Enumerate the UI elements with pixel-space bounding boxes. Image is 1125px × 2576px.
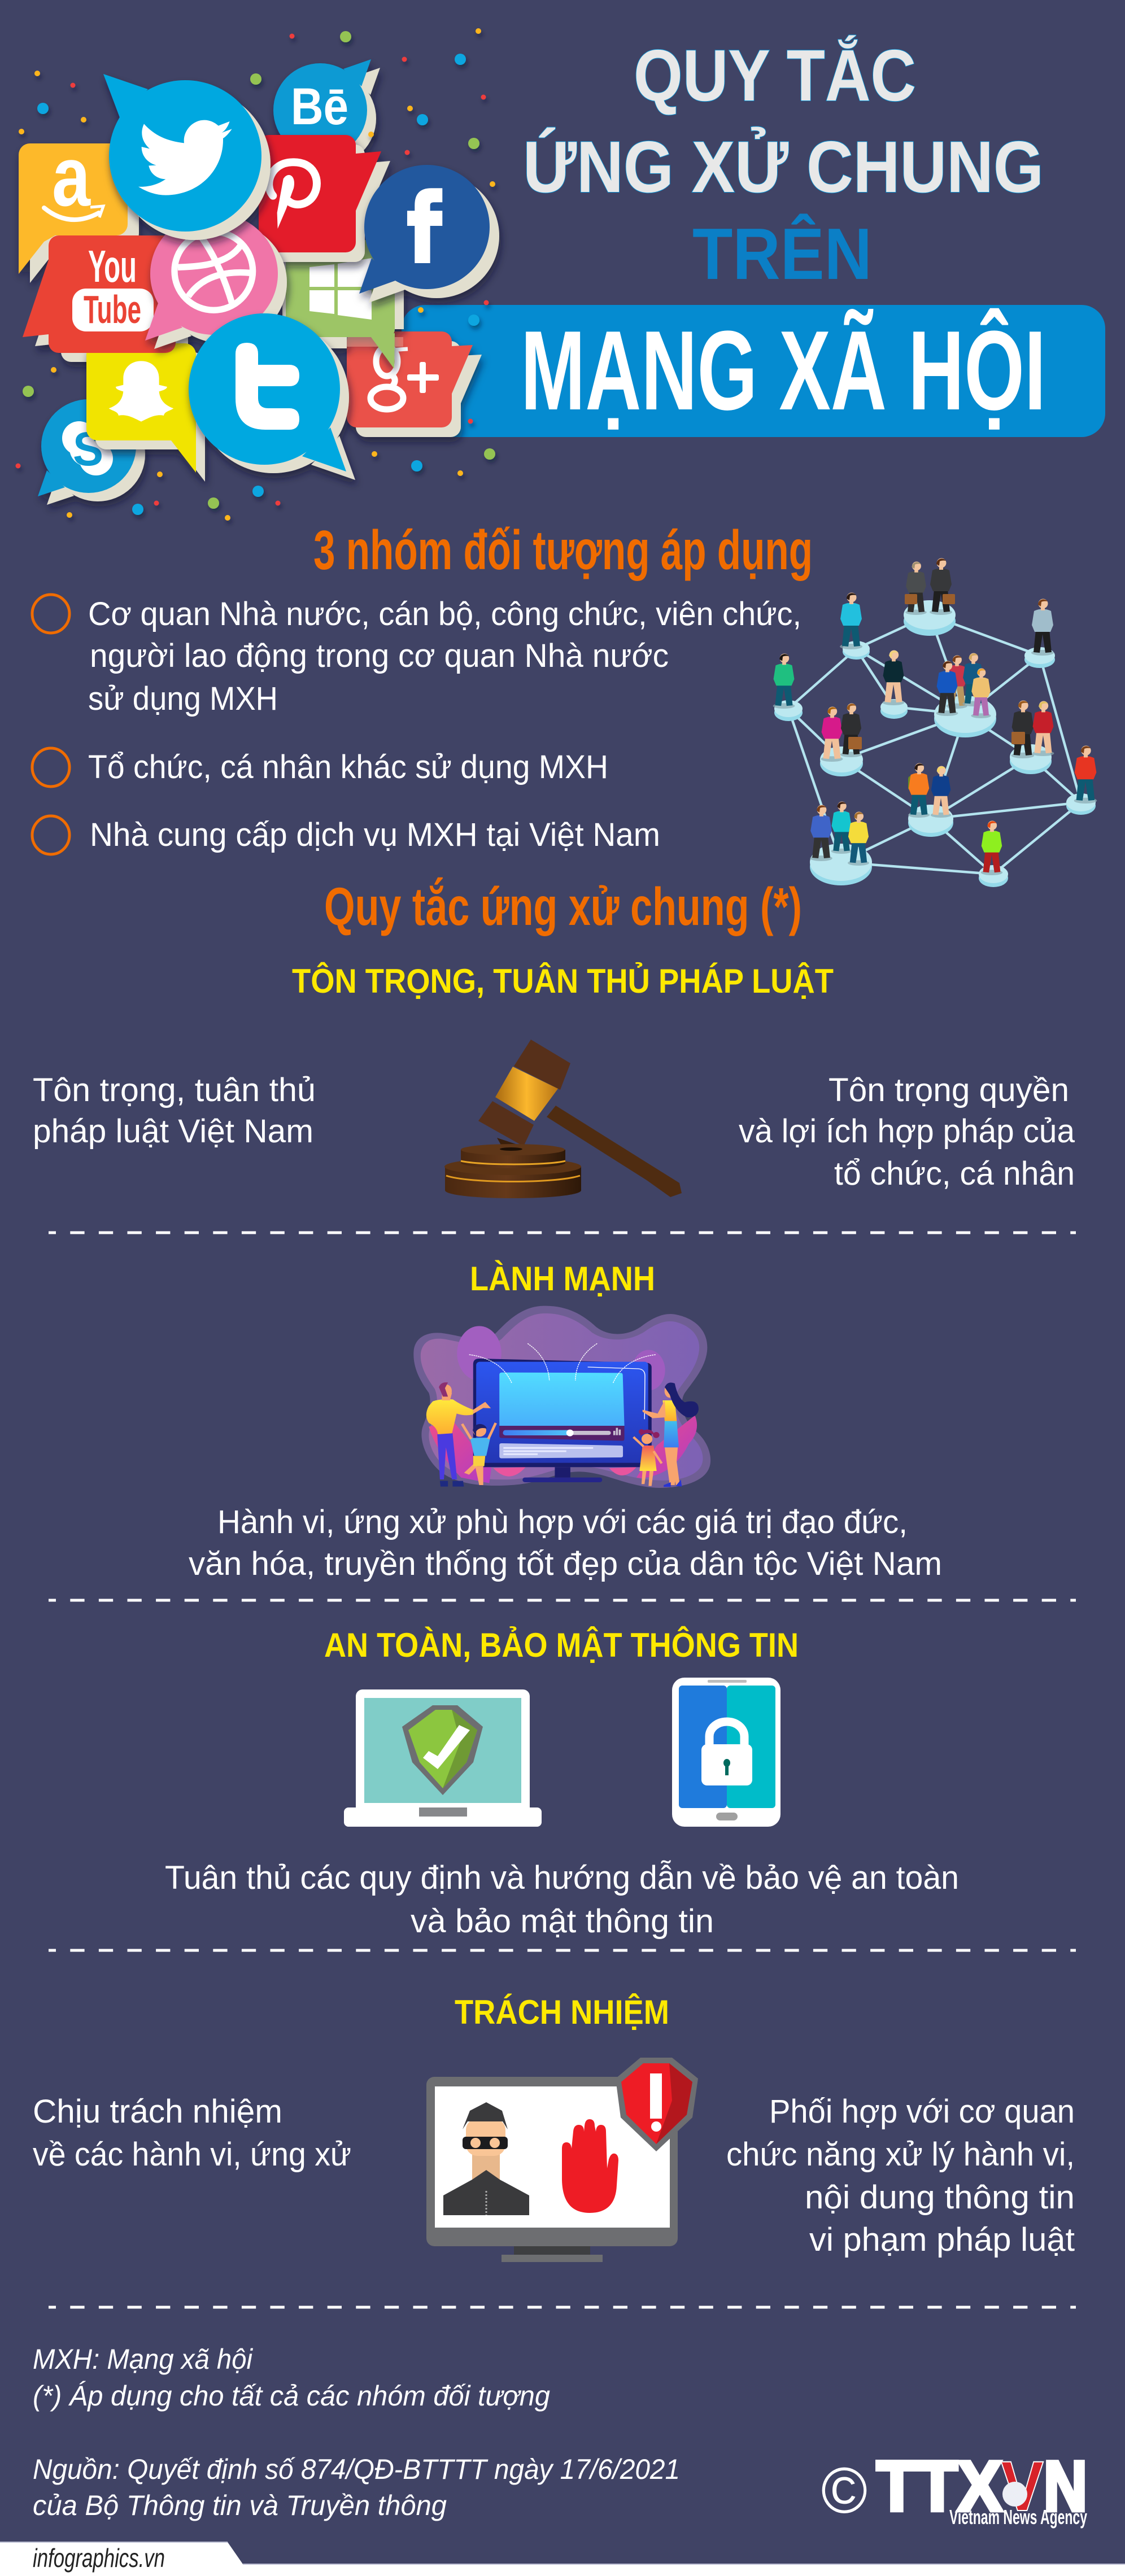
light rays — [469, 1343, 656, 1383]
icon: skype bubble — [38, 399, 145, 505]
logo: TTXVN: © — [821, 2455, 867, 2527]
heading: 3 target groups: 3 nhóm đối tượng áp dụng — [313, 519, 813, 581]
hacker — [443, 2102, 529, 2215]
man — [426, 1382, 491, 1487]
icon: youtube bubble: Tube — [84, 287, 141, 331]
decorative confetti dots — [16, 28, 495, 521]
text block: respect law left: Tôn trọng, tuân thủ — [33, 1072, 316, 1108]
text block: respect law right: và lợi ích hợp pháp của — [739, 1113, 1075, 1150]
girl — [634, 1429, 662, 1486]
section heading: healthy: LÀNH MẠNH — [470, 1260, 655, 1298]
text block: respect law right: tổ chức, cá nhân — [834, 1155, 1075, 1192]
woman — [643, 1382, 699, 1487]
text block: respect law right — [739, 1072, 1075, 1192]
icon: monitor with hacker, stop hand and warning shield — [426, 2058, 698, 2262]
icon: google plus bubble — [347, 331, 482, 437]
stop hand — [562, 2119, 618, 2213]
icon: dribbble bubble — [145, 213, 287, 349]
text block: healthy description — [189, 1504, 942, 1582]
section heading: responsibility: TRÁCH NHIỆM — [455, 1993, 669, 2031]
text block: security description — [165, 1859, 959, 1940]
logo: TTXVN: TTX — [877, 2447, 1002, 2526]
icon: skype bubble: S — [73, 422, 103, 475]
bullet 1: người lao động trong cơ quan Nhà nước — [90, 638, 669, 674]
icon: youtube bubble: You — [88, 241, 137, 291]
icon: youtube bubble — [23, 235, 176, 353]
icon: laptop with shield — [344, 1689, 542, 1827]
footer strip: infographics.vn — [33, 2543, 165, 2573]
title: QUY TẮC — [634, 34, 916, 116]
footer strip — [0, 2542, 1125, 2576]
text block: healthy description: văn hóa, truyền thống tốt đẹp của dân tộc Việt Nam — [189, 1545, 942, 1582]
text block: respect law right: Tôn trọng quyền — [829, 1072, 1069, 1108]
footnotes — [33, 2343, 550, 2412]
text block: security description: và bảo mật thông tin — [411, 1903, 714, 1940]
icon: twitter t bubble — [189, 313, 355, 480]
text block: responsibility left: về các hành vi, ứng xử — [33, 2136, 351, 2173]
text block: responsibility right: vi phạm pháp luật — [809, 2221, 1075, 2258]
illustration: social media icons — [19, 59, 499, 505]
bullet 2: Tổ chức, cá nhân khác sử dụng MXH — [88, 749, 608, 785]
source — [33, 2453, 680, 2521]
text block: healthy description: Hành vi, ứng xử phù hợp với các giá trị đạo đức, — [217, 1504, 908, 1540]
section heading: safety and security: AN TOÀN, BẢO MẬT THÔNG TIN — [324, 1626, 799, 1664]
icon: behance bubble — [273, 59, 380, 165]
title: TRÊN — [692, 213, 872, 295]
title: ỨNG XỬ CHUNG — [523, 126, 1044, 208]
title — [521, 34, 1046, 434]
bullet 1: Cơ quan Nhà nước, cán bộ, công chức, viên chức, — [88, 596, 801, 632]
icon: facebook bubble — [359, 165, 499, 303]
warning shield — [616, 2058, 698, 2151]
icon: amazon bubble — [19, 129, 139, 283]
text block: responsibility left — [33, 2093, 351, 2173]
icon: gavel — [444, 1040, 682, 1198]
heading: common rules: Quy tắc ứng xử chung (*) — [324, 877, 802, 937]
bullet list: target groups — [32, 595, 801, 854]
background blob — [413, 1306, 710, 1488]
logo: TTXVN: V — [1001, 2447, 1044, 2526]
shield — [402, 1705, 483, 1795]
illustration: people network — [773, 558, 1097, 887]
footnotes: (*) Áp dụng cho tất cả các nhóm đối tượng — [33, 2380, 550, 2412]
boy — [462, 1423, 496, 1485]
title banner bar — [402, 305, 1105, 437]
bullet 1 — [32, 595, 801, 717]
icon: pinterest bubble — [259, 135, 390, 262]
icon: windows bubble — [282, 240, 404, 369]
text block: responsibility right: chức năng xử lý hành vi, — [726, 2136, 1075, 2173]
icon: behance bubble: Bē — [291, 78, 348, 136]
icon: snapchat bubble — [86, 343, 205, 482]
text block: responsibility right: nội dung thông tin — [805, 2179, 1075, 2216]
leaves — [457, 1326, 502, 1381]
text block: respect law left: pháp luật Việt Nam — [33, 1113, 313, 1150]
text block: security description: Tuân thủ các quy định và hướng dẫn về bảo vệ an toàn — [165, 1859, 959, 1896]
text block: respect law left — [33, 1072, 316, 1150]
section heading: respect the law: TÔN TRỌNG, TUÂN THỦ PHÁP LUẬT — [292, 962, 834, 1000]
bullet 3: Nhà cung cấp dịch vụ MXH tại Việt Nam — [90, 817, 660, 853]
text block: responsibility left: Chịu trách nhiệm — [33, 2093, 282, 2130]
logo: TTXVN: N — [1044, 2447, 1087, 2526]
source: Nguồn: Quyết định số 874/QĐ-BTTTT ngày 17/6/2021 — [33, 2453, 680, 2485]
monitor — [473, 1359, 652, 1467]
icon: twitter bird bubble — [103, 74, 271, 240]
illustration: family and screen — [413, 1306, 710, 1488]
youtube backing layer — [35, 244, 188, 362]
bullet 1: sử dụng MXH — [88, 680, 278, 717]
icon: phone with lock — [672, 1678, 780, 1827]
source: của Bộ Thông tin và Truyền thông — [33, 2490, 447, 2521]
text block: responsibility right: Phối hợp với cơ quan — [769, 2093, 1075, 2130]
icon: amazon bubble: a — [52, 129, 91, 224]
logo: TTXVN — [821, 2447, 1087, 2529]
text block: responsibility right — [726, 2093, 1075, 2258]
footnotes: MXH: Mạng xã hội — [33, 2343, 254, 2375]
